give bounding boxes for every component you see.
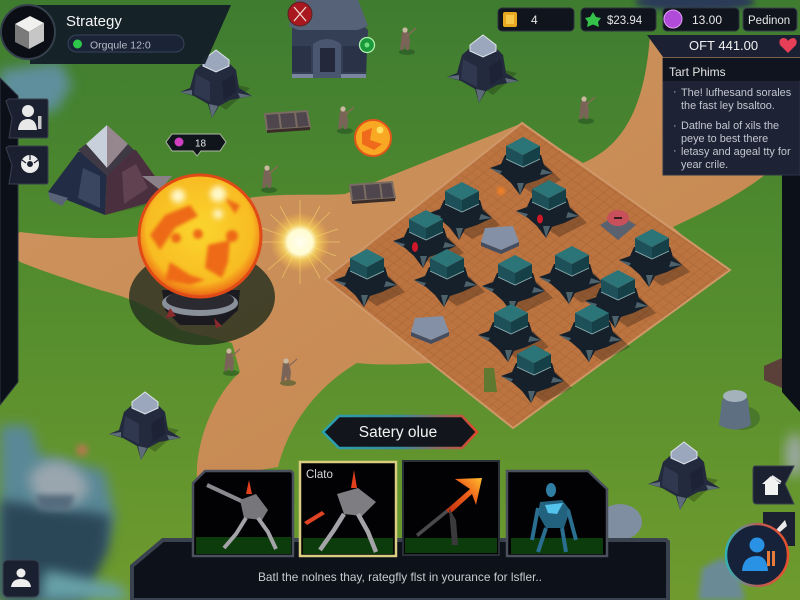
panel: bottom message: Batl the nolnes thay, rategfly flst in yourance for lsfler.. (258, 570, 542, 584)
icon: heart (779, 38, 797, 53)
button: player pause (726, 524, 788, 586)
label: selected strategy: Satery olue (359, 424, 437, 441)
crate at right edge (764, 358, 782, 388)
dirt path (12, 35, 800, 480)
teal towers on the grid (334, 137, 690, 403)
status pill: Orgqule 12:0 (90, 40, 151, 52)
header banner (30, 5, 231, 64)
small fireball (355, 120, 391, 156)
resource: money (581, 8, 656, 31)
panel: bottom message (132, 540, 668, 600)
tips list: Datlne bal of xils the (681, 120, 779, 132)
dark blue tower lower right (648, 442, 720, 510)
resource: coins (498, 8, 574, 31)
resource: money: $23.94 (607, 15, 643, 27)
callout: gem count 18 (166, 134, 226, 156)
icon: cube emblem (1, 5, 55, 59)
dark blue tower lower left (109, 392, 181, 460)
tips list (673, 86, 792, 171)
left frame edge (0, 78, 18, 405)
panel: tips (663, 58, 800, 175)
card: selected mech (300, 462, 396, 556)
card: blue warrior (507, 471, 607, 556)
resource: coins: 4 (531, 13, 538, 27)
side button: profile (6, 99, 48, 138)
dark blue tower top centre-left (180, 50, 252, 118)
tips list: letasy and ageal tty for (681, 146, 791, 158)
panel: score header: OFT 441.00 (689, 38, 758, 53)
blurred foreground: bottom left rocks (0, 425, 130, 600)
icon: green status badge (360, 38, 374, 52)
card: fire axe (403, 461, 499, 555)
blurred foreground: top left rock (0, 62, 72, 112)
chest beside grid (350, 182, 395, 204)
tips list: · (673, 120, 677, 132)
large fireball orb (138, 174, 262, 298)
heading: strategy: Strategy (66, 13, 122, 30)
right frame edge (782, 175, 800, 412)
tips list: · (673, 86, 677, 98)
icon: red crossed swords emblem (288, 2, 312, 26)
panel: strategy header (1, 5, 231, 64)
button: home (753, 466, 794, 504)
card: gunner (193, 471, 293, 556)
card: selected mech: Clato (306, 469, 333, 481)
grey supply blocks (411, 226, 519, 344)
dome silo (719, 390, 760, 430)
resource: gems: 13.00 (692, 13, 722, 27)
tips list: peye to best there (681, 133, 768, 145)
panel: score header (647, 35, 800, 57)
resource: gems (663, 8, 739, 31)
tips list: year crile. (681, 159, 728, 171)
soldier units (223, 27, 595, 392)
tips heading: Tart Phims (669, 65, 726, 79)
resource: player name: Pedinon (748, 15, 790, 27)
button: tools (763, 512, 795, 546)
dark blue tower top centre-right (447, 35, 519, 103)
resource: player name (743, 8, 797, 31)
chest near small fireball (265, 111, 310, 133)
fireball turret base (162, 290, 240, 328)
tips list: The! lufhesand sorales (681, 87, 792, 99)
flash burst with rays (262, 200, 340, 284)
tips list: the fast ley bsaltoo. (681, 100, 775, 112)
side button: flower gear (6, 146, 48, 184)
castle gate building (289, 0, 368, 78)
blurred foreground: top and bottom right rocks (598, 0, 800, 600)
button: bottom left profile (3, 560, 39, 597)
status pill (68, 35, 184, 52)
checkered build grid (325, 123, 730, 428)
maroon base building (48, 125, 172, 215)
tips list: · (673, 145, 677, 157)
label: selected strategy (323, 416, 477, 448)
callout: gem count 18: 18 (195, 138, 207, 150)
large fireball shadow (129, 249, 275, 345)
red turret (600, 210, 636, 240)
